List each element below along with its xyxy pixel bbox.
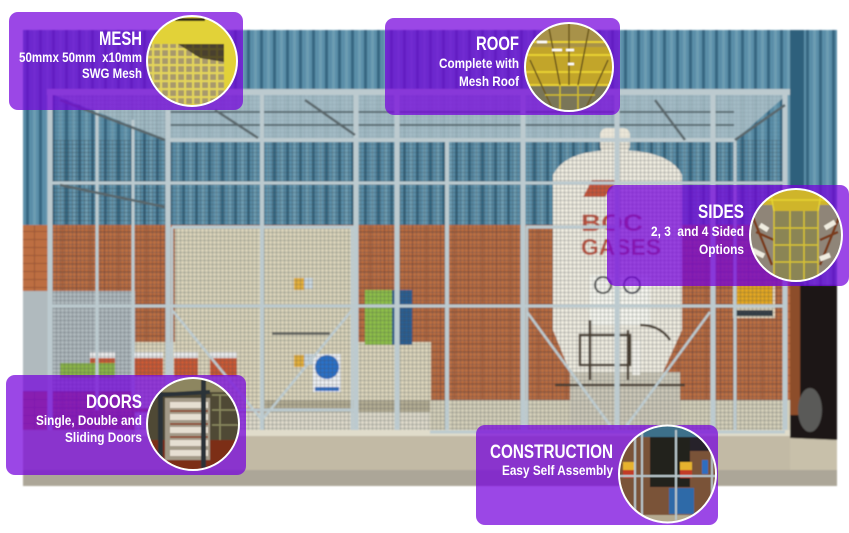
chemical tank details [365,290,392,345]
panel: construction [476,425,718,525]
panel: sides [607,185,849,286]
construction heading: CONSTRUCTION [490,442,613,463]
mesh description [19,49,142,81]
roof description: Mesh Roof [459,73,519,89]
roof description [439,55,519,89]
doors heading: DOORS [86,392,142,413]
tank [600,128,630,153]
sides heading: SIDES [698,202,744,223]
construction description: Easy Self Assembly [502,462,613,478]
doors description: Sliding Doors [65,429,142,445]
sides description: Options [699,241,744,257]
doors description: Single, Double and [36,412,142,428]
icon: cage assembly with signs [619,425,716,525]
sides description: 2, 3 and 4 Sided [651,223,744,239]
sides description [651,223,744,257]
icon: caged warehouse with sides [750,189,842,281]
panel: roof [385,18,620,115]
frame [47,92,790,432]
mesh description: 50mmx 50mm x10mm [19,49,142,65]
mesh [50,140,785,430]
mesh heading: MESH [99,29,142,50]
roof description: Complete with [439,55,519,71]
panel: mesh [9,12,243,110]
background photo: mesh cage around gas tank: GASES [581,234,661,260]
icon: yellow mesh close-up [147,16,237,106]
doors description [36,412,142,445]
icon: yellow mesh roof [525,23,613,111]
background photo: mesh cage around gas tank: BOC [581,210,643,237]
panel: doors [6,375,246,475]
mesh description: SWG Mesh [82,65,142,81]
icon: warehouse door [147,378,239,470]
roof heading: ROOF [476,34,519,55]
